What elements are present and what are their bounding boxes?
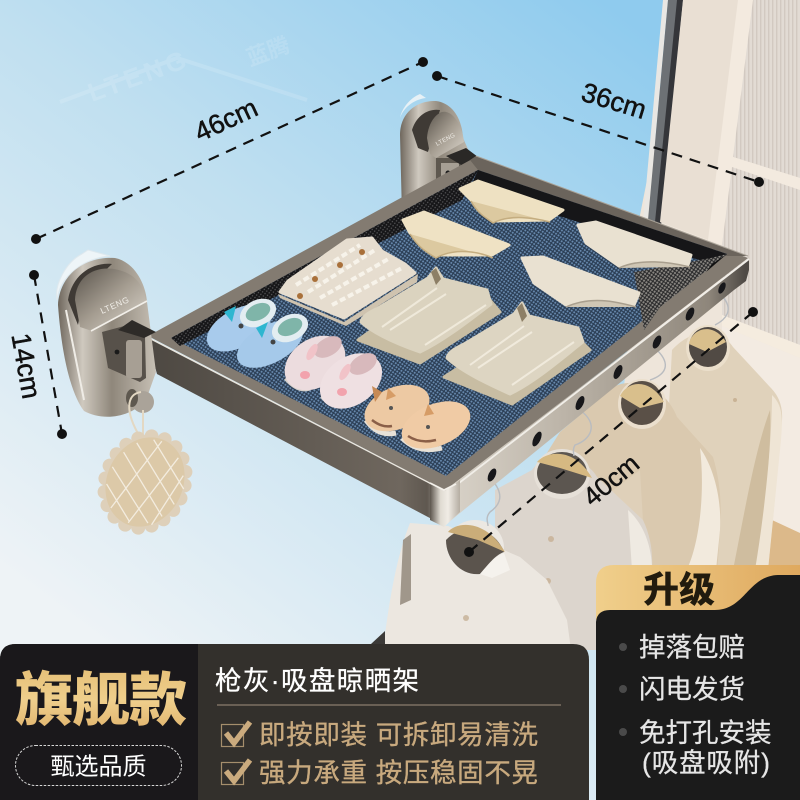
shirt 4	[660, 325, 782, 570]
panel: product info	[0, 644, 589, 800]
dimension: 46cm: 46cm	[190, 92, 262, 148]
list: upgrade benefits: 闪电发货	[639, 674, 745, 704]
dimension: 40cm	[464, 307, 758, 557]
right front rail	[444, 259, 749, 526]
underwear 3	[578, 222, 691, 268]
folded jacket 2	[444, 303, 590, 404]
mesh dark walls	[171, 170, 478, 346]
mesh floor	[171, 170, 727, 476]
beige shark slippers	[358, 376, 477, 458]
underwear 1	[460, 181, 563, 223]
left front bar	[147, 337, 445, 526]
heading: upgrade: 升级	[643, 569, 715, 610]
feature: install and clean: 即按即装 可拆卸易清洗	[259, 720, 538, 750]
dimension: 14cm: 14cm	[5, 331, 47, 401]
flagship block background	[0, 644, 198, 800]
clothes: four shirts on hangers	[383, 325, 782, 650]
right suction bracket: LTENG	[435, 133, 457, 148]
bracket body	[58, 258, 156, 417]
watermark: faint brand mark	[60, 32, 307, 108]
dark list area	[596, 575, 800, 800]
shirt 2	[495, 449, 652, 650]
back rail top surface	[470, 156, 748, 256]
pink bunny slippers	[274, 324, 393, 420]
list: upgrade benefits: 掉落包赔	[639, 632, 745, 662]
bracket cap with logo	[75, 269, 146, 331]
gold header band	[596, 565, 800, 800]
front corner	[430, 480, 460, 527]
underwear 2	[403, 212, 509, 258]
folded jacket 1	[358, 268, 500, 363]
dimension: 36cm: 36cm	[578, 77, 650, 125]
watermark: faint brand mark: 蓝腾	[243, 32, 293, 71]
dimension: 36cm	[432, 71, 764, 187]
left suction bracket	[57, 250, 156, 417]
laundry items on tray	[199, 181, 691, 458]
underwear 4	[522, 257, 639, 307]
shirt 3	[530, 379, 721, 650]
window edge behind panel	[371, 631, 385, 644]
left suction bracket: LTENG	[99, 294, 131, 316]
blue slippers	[199, 293, 313, 378]
list: upgrade benefits	[619, 632, 772, 778]
shirt 1	[383, 520, 571, 650]
info panel background	[0, 644, 589, 800]
tray rim	[148, 158, 748, 491]
dimension: 46cm	[31, 57, 428, 244]
heading: flagship: 旗舰款	[15, 668, 187, 733]
knob	[132, 391, 154, 413]
dimension: 40cm: 40cm	[577, 448, 645, 512]
panel: upgrade	[596, 565, 800, 800]
hanger hooks: wires from rail to shirts	[487, 296, 728, 526]
knit sweater	[278, 238, 418, 326]
suction cup and tab	[57, 250, 110, 300]
watermark: faint brand mark: LTENG	[84, 43, 194, 108]
list: upgrade benefits: (吸盘吸附)	[642, 748, 770, 778]
right suction bracket	[400, 94, 482, 215]
rail holes	[486, 281, 727, 483]
room: window frame, wall, shelf and floor	[600, 0, 800, 650]
badge: selected quality	[16, 746, 182, 786]
badge: selected quality: 甄选品质	[50, 754, 146, 780]
feature: strong load: 强力承重 按压稳固不晃	[259, 758, 538, 788]
product title: 枪灰·吸盘晾晒架	[215, 666, 419, 696]
dimension: 14cm	[5, 270, 67, 439]
drying rack tray	[147, 156, 749, 527]
loofah sponge on a loop	[90, 392, 200, 541]
clamp block	[102, 325, 146, 382]
list: upgrade benefits: 免打孔安装	[639, 718, 772, 748]
